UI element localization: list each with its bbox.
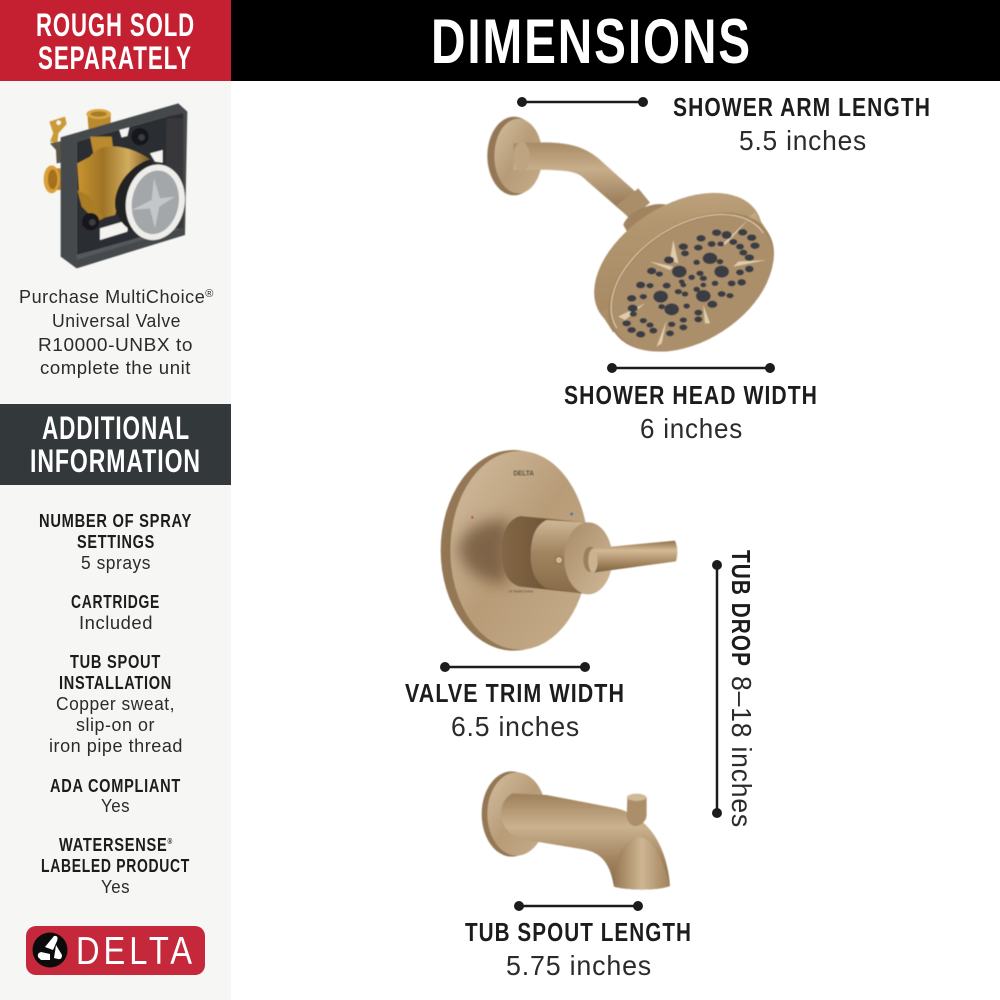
dimension line: tub drop [712,560,722,818]
heading: additional information [0,404,231,485]
icon: tub spout [482,771,670,890]
text block: tub spout installation: INSTALLATION [59,673,172,693]
text block: cartridge: CARTRIDGE [71,592,160,612]
label: tub spout length: 5.75 inches [506,950,652,981]
heading: additional information: ADDITIONAL [42,410,190,446]
header: rough sold separately: ROUGH SOLD [36,7,195,43]
label: shower head width: 6 inches [640,413,743,444]
panel: left sidebar [0,81,231,1000]
icon: valve trim: 14 MultiChoice [508,590,533,594]
text block: spray settings: NUMBER OF SPRAY [39,511,192,531]
text block: ADA compliant: ADA COMPLIANT [50,776,181,796]
text block: watersense: LABELED PRODUCT [41,856,190,876]
text block: tub spout installation: slip-on or [76,715,155,735]
logo: Delta: DELTA [76,930,196,973]
text block: watersense: WATERSENSE [59,835,193,855]
label: shower head width [564,380,818,444]
text block: tub spout installation: iron pipe thread [49,736,183,756]
text block: watersense: Yes [101,877,130,897]
heading: additional information: INFORMATION [30,443,201,479]
text block: cartridge: Included [79,613,153,633]
text block: purchase note [19,287,214,378]
icon: rough-in valve product [44,103,191,268]
text block: purchase note: complete the unit [40,358,191,378]
label: shower arm length: SHOWER ARM LENGTH [673,92,931,122]
text block: tub spout installation: TUB SPOUT [70,652,161,672]
label: tub spout length [465,917,692,981]
text block: spray settings: SETTINGS [77,532,155,552]
text block: spray settings: 5 sprays [81,553,151,573]
text block: watersense: ® [167,837,173,846]
text block: ADA compliant: Yes [101,796,130,816]
text block: spray settings [39,511,192,573]
dimension line: valve trim width [440,662,590,672]
label: valve trim width [405,678,625,742]
label: shower arm length: 5.5 inches [739,125,867,156]
label: tub drop [726,550,757,828]
label: shower arm length [673,92,931,156]
dimension line: shower head width [607,363,775,373]
text block: tub spout installation: Copper sweat, [56,694,175,714]
text block: purchase note: ® [205,288,214,300]
dimension line: shower arm length [517,97,648,107]
text block: purchase note: R10000-UNBX to [38,335,193,355]
text block: purchase note: Universal Valve [52,311,181,331]
logo: Delta [26,926,205,975]
header: rough sold separately: SEPARATELY [38,40,192,76]
label: shower head width: SHOWER HEAD WIDTH [564,380,818,410]
text block: tub spout installation [49,652,183,756]
header: rough sold separately [0,0,231,81]
label: tub spout length: TUB SPOUT LENGTH [465,917,692,947]
label: valve trim width: VALVE TRIM WIDTH [405,678,625,708]
label: valve trim width: 6.5 inches [451,711,580,742]
text block: cartridge [71,592,160,633]
text block: purchase note: Purchase MultiChoice [19,287,205,307]
icon: shower arm and head [487,117,801,382]
icon: valve trim [441,450,677,651]
label: tub drop: 8–18 inches [726,676,757,828]
text block: watersense [41,835,190,897]
title: dimensions: DIMENSIONS [431,7,752,77]
text block: ADA compliant [50,776,181,816]
dimension line: tub spout length [514,901,643,911]
label: tub drop: TUB DROP [726,550,756,667]
title: dimensions [231,0,1000,81]
icon: valve trim: DELTA [513,469,534,478]
